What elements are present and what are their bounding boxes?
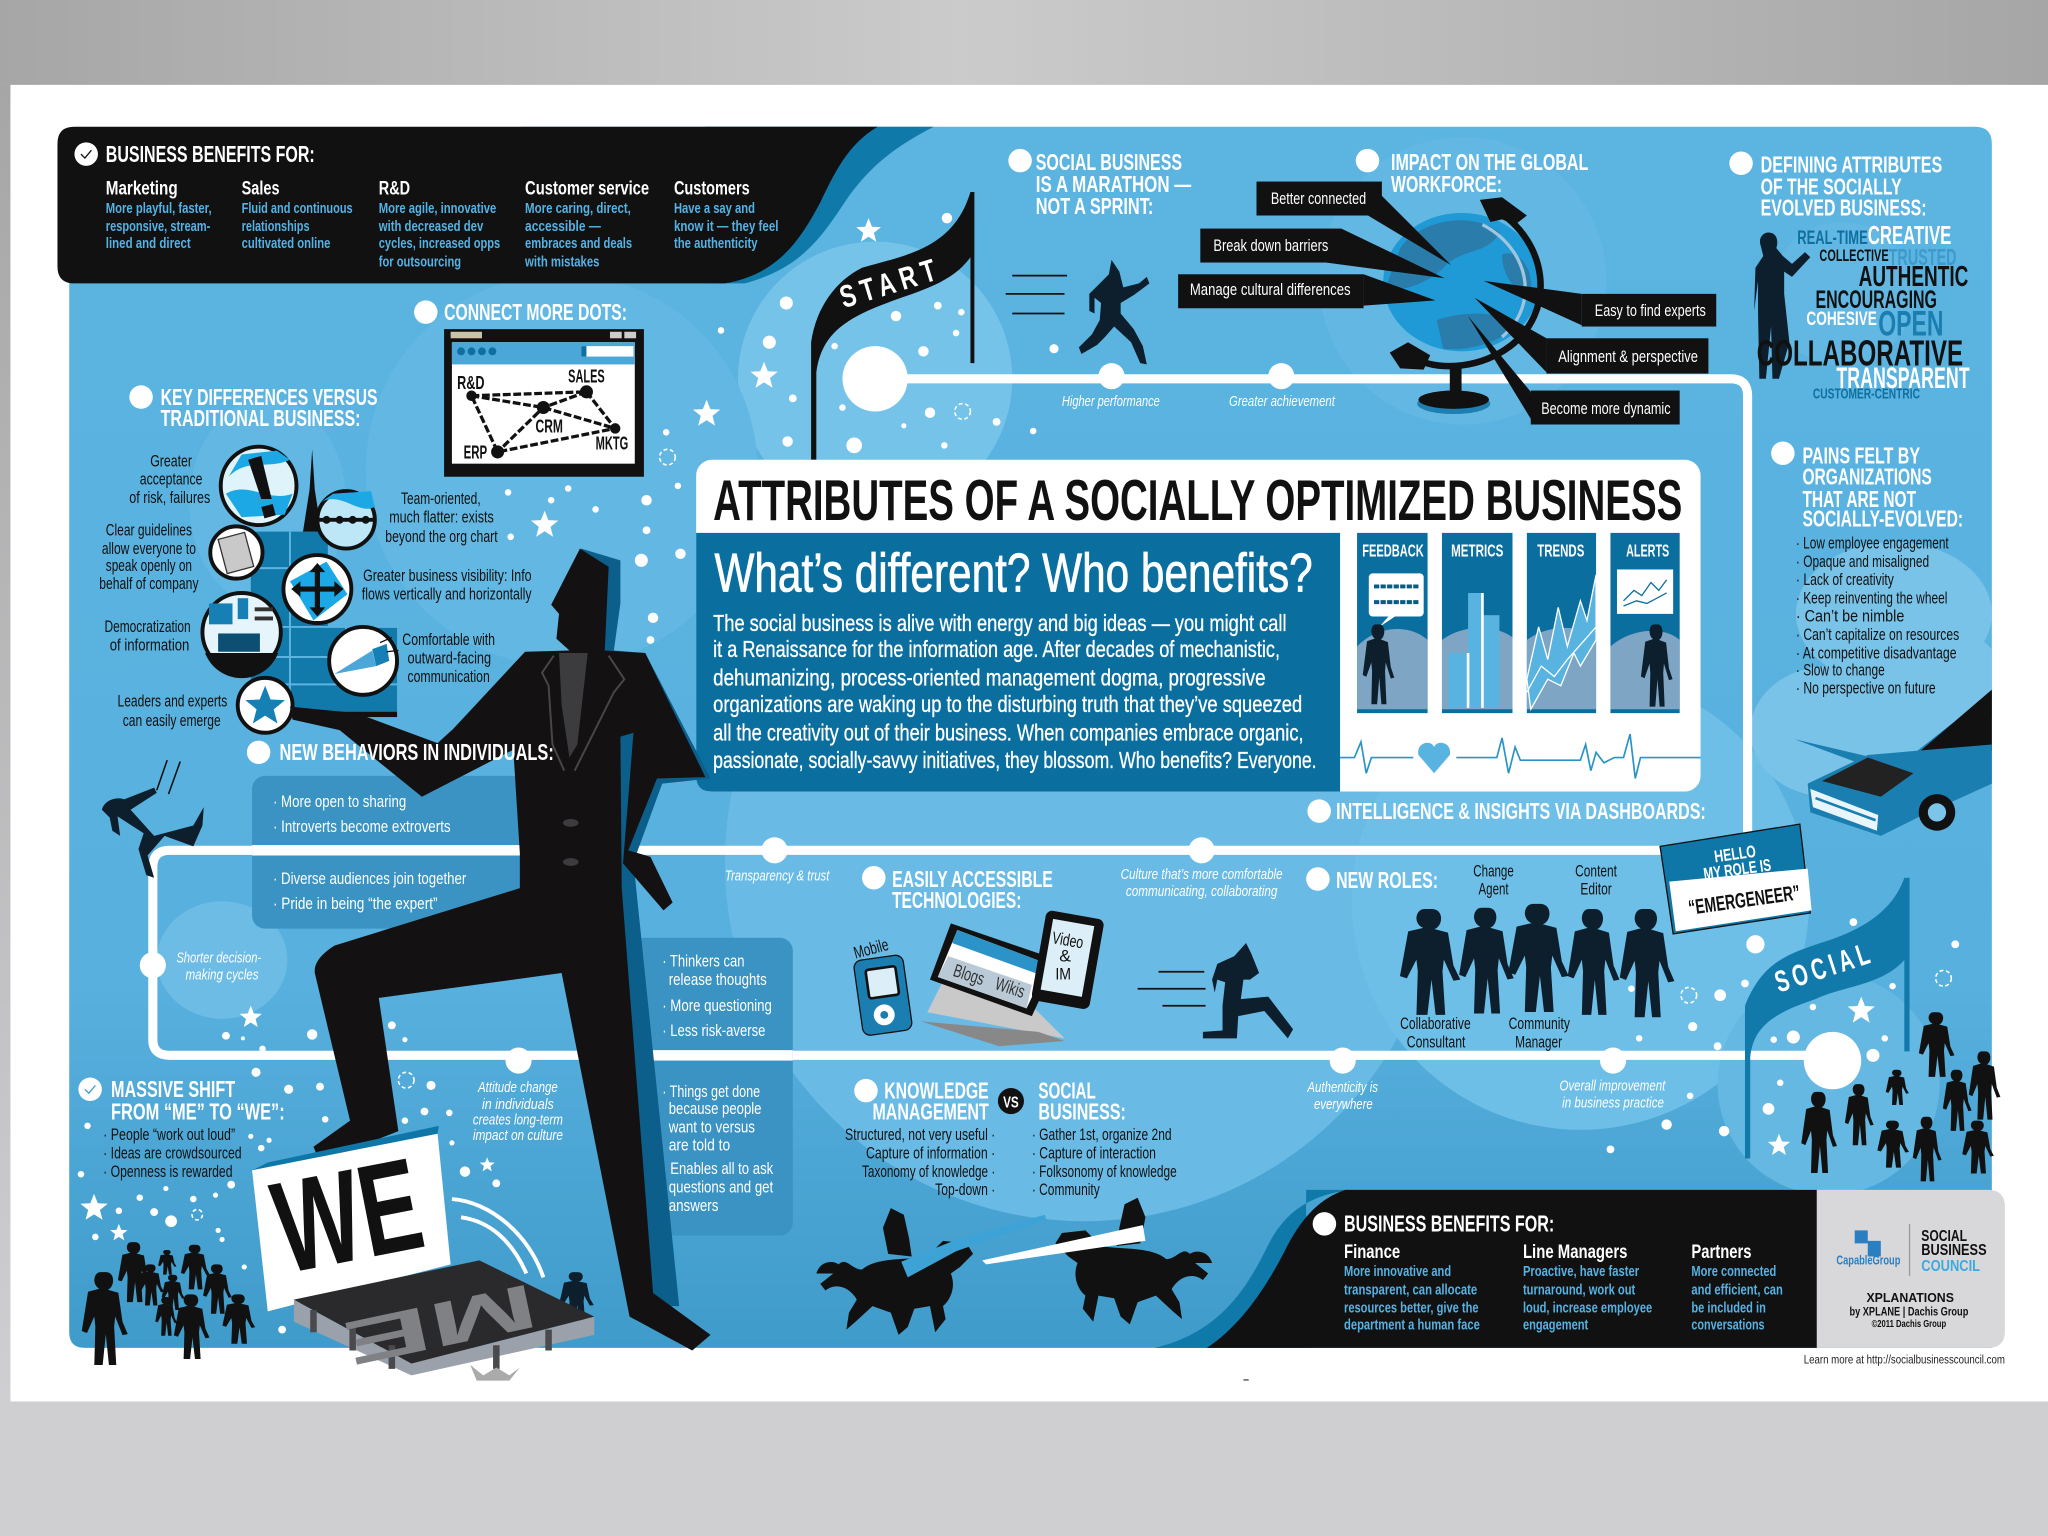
column: customer service: More caring, direct,: [525, 201, 631, 217]
panel: behaviors continued: · Less risk-averse: [662, 1021, 765, 1040]
list: massive shift: · People “work out loud”: [103, 1125, 235, 1144]
list: pains: · Can’t be nimble: [1796, 607, 1904, 626]
heading: knowledge vs social: [854, 1077, 1126, 1124]
heading: new behaviors: NEW BEHAVIORS IN INDIVIDUALS:: [280, 739, 554, 765]
devices: mobile, laptop, tablet: Wikis: [993, 973, 1028, 1002]
column: customer service: [524, 178, 649, 270]
heading: dashboards: [1307, 798, 1706, 824]
logo panel: [1817, 1190, 2005, 1348]
horse right: [1055, 1198, 1212, 1324]
italic milestone notes: [176, 394, 1666, 1144]
icon: globe: [1383, 197, 1541, 414]
list: massive shift: · Openness is rewarded: [103, 1162, 232, 1181]
heading: business benefits: [74, 141, 315, 167]
labels: new roles: Collaborative: [1400, 1014, 1471, 1033]
panel: business benefits bottom: [1155, 1190, 1817, 1348]
list: knowledge management: Top-down ·: [935, 1180, 995, 1199]
labels: new roles: Consultant: [1407, 1033, 1466, 1052]
callout: manage cultural differences: Manage cultural differences: [1190, 281, 1351, 299]
labels: key differences left: acceptance: [140, 470, 202, 489]
column: line managers: Proactive, have faster: [1523, 1264, 1639, 1280]
heading: business benefits: BUSINESS BENEFITS FOR:: [1344, 1211, 1554, 1237]
heading: defining attributes: OF THE SOCIALLY: [1761, 174, 1902, 200]
labels: key differences right: Greater business visibility: Info: [363, 566, 532, 585]
callout: better connected: Better connected: [1271, 190, 1366, 208]
icon: exclamation: [221, 447, 296, 525]
list: knowledge management: [845, 1125, 995, 1199]
heading: pains: PAINS FELT BY: [1802, 443, 1920, 469]
heading: massive shift: FROM “ME” TO “WE”:: [111, 1098, 285, 1124]
logo panel: SOCIAL: [1921, 1228, 1967, 1245]
list: social business: · Gather 1st, organize 2nd: [1032, 1125, 1172, 1144]
italic milestone notes: in business practice: [1562, 1096, 1664, 1112]
icon: org chain: [317, 491, 375, 549]
italic milestone notes: making cycles: [185, 968, 259, 984]
labels: key differences left: Leaders and experts: [118, 692, 227, 711]
column: customer service: embraces and deals: [525, 236, 632, 252]
word cloud: [1757, 220, 1970, 402]
labels: key differences left: of risk, failures: [129, 488, 210, 507]
column: customer service: with mistakes: [524, 254, 600, 270]
labels: key differences left: behalf of company: [99, 574, 199, 593]
column: sales: Fluid and continuous: [242, 201, 353, 217]
dashboard: trends: [1527, 533, 1596, 713]
list: pains: [1796, 534, 1959, 698]
panel: behaviors continued: · Enables all to ask: [662, 1159, 774, 1178]
word cloud: ENCOURAGING: [1816, 287, 1937, 314]
heading: massive shift: MASSIVE SHIFT: [111, 1076, 236, 1102]
heading: defining attributes: [1729, 151, 1942, 221]
labels: key differences left: Democratization: [104, 617, 191, 636]
panel: new behaviors: · More open to sharing: [273, 792, 406, 811]
labels: new roles: Change: [1473, 861, 1514, 880]
word cloud: REAL-TIME: [1797, 227, 1868, 249]
browser window: network diagram: MKTG: [596, 432, 628, 453]
heading: dashboards: INTELLIGENCE & INSIGHTS VIA DASHBOARDS:: [1336, 798, 1706, 824]
word cloud: CREATIVE: [1868, 220, 1951, 250]
column: finance: department a human face: [1344, 1318, 1480, 1334]
broken ME slab: ME: [337, 1270, 544, 1379]
panel: behaviors continued: answers: [669, 1196, 718, 1215]
column: sales: [242, 178, 353, 252]
panel: intro copy: dehumanizing, process-oriented management dogma, progressive: [713, 665, 1266, 691]
column: customers: Have a say and: [674, 201, 755, 217]
heading: massive shift: [78, 1076, 285, 1124]
figure: woman presenting: [1754, 232, 1810, 379]
building held by the man with icons: [202, 447, 398, 733]
word cloud: COLLECTIVE: [1819, 246, 1889, 265]
logo panel: CapableGroup: [1836, 1252, 1900, 1267]
card: WE: WE: [262, 1130, 433, 1301]
heading: technologies: [862, 866, 1053, 913]
callout: become more dynamic: [1468, 316, 1680, 424]
lance right: [982, 1225, 1145, 1264]
name tag: emergeneer: HELLO: [1713, 842, 1757, 866]
column: customers: the authenticity: [674, 236, 758, 252]
start flag: START: [836, 251, 946, 315]
panel: intro copy: organizations are waking up to the disturbing truth that they’ve squeezed: [713, 691, 1302, 717]
central man figure: [290, 549, 711, 1351]
column: marketing: More playful, faster,: [106, 201, 212, 217]
browser window: network diagram: CRM: [536, 415, 563, 436]
column: line managers: engagement: [1523, 1318, 1588, 1334]
name tag: emergeneer: MY ROLE IS: [1702, 855, 1772, 884]
crowd left: [82, 1242, 255, 1365]
column: sales: relationships: [242, 219, 310, 235]
list: pains: · Lack of creativity: [1796, 570, 1894, 589]
list: knowledge management: Structured, not very useful ·: [845, 1125, 995, 1144]
runner with speed lines: [1006, 260, 1149, 364]
column: sales: cultivated online: [242, 236, 330, 252]
panel: behaviors continued: · More questioning: [662, 996, 772, 1015]
heading: global workforce: WORKFORCE:: [1391, 171, 1502, 197]
labels: new roles: Content: [1575, 861, 1617, 880]
labels: key differences right: Comfortable with: [402, 630, 495, 649]
column: marketing: responsive, stream-: [106, 219, 210, 235]
italic milestone notes: Shorter decision-: [176, 951, 261, 967]
dashboard: metrics: [1442, 533, 1512, 713]
panel: intro copy: What’s different? Who benefits?: [714, 542, 1313, 604]
labels: key differences left: Greater: [150, 451, 192, 470]
list: knowledge management: Capture of information ·: [866, 1144, 995, 1163]
logo panel: BUSINESS: [1921, 1242, 1987, 1259]
list: social business: · Capture of interaction: [1032, 1144, 1156, 1163]
list: massive shift: [103, 1125, 242, 1181]
heading: technologies: EASILY ACCESSIBLE: [892, 866, 1053, 892]
column: marketing: Marketing: [106, 178, 178, 200]
heading: connect more dots: CONNECT MORE DOTS:: [444, 299, 627, 325]
column: finance: Finance: [1344, 1241, 1400, 1263]
list: knowledge management: Taxonomy of knowledge ·: [862, 1162, 995, 1181]
list: pains: · Keep reinventing the wheel: [1796, 588, 1947, 607]
callout: easy to find experts: Easy to find experts: [1595, 302, 1706, 320]
callout: become more dynamic: Become more dynamic: [1541, 400, 1671, 418]
central card: [696, 460, 1701, 792]
heading: knowledge vs social: SOCIAL: [1038, 1077, 1096, 1103]
column: R&D: [378, 178, 500, 270]
browser window: network diagram: SALES: [568, 366, 605, 387]
panel: behaviors continued: questions and get: [669, 1177, 773, 1196]
heading: marathon: NOT A SPRINT:: [1036, 193, 1153, 219]
column: line managers: turnaround, work out: [1523, 1282, 1635, 1298]
panel: new behaviors: · Pride in being “the expert”: [273, 894, 438, 913]
panel: intro copy: it a Renaissance for the information age. After decades of mechanistic,: [713, 636, 1280, 662]
column: customers: [674, 178, 778, 252]
labels: new roles: Editor: [1580, 880, 1612, 899]
labels: key differences left: allow everyone to: [102, 539, 196, 558]
name tag: emergeneer: “EMERGENEER”: [1687, 881, 1801, 920]
falling person: [102, 760, 204, 878]
heading: new behaviors: [247, 739, 554, 765]
column: R&D: cycles, increased opps: [379, 236, 500, 252]
column: finance: resources better, give the: [1344, 1301, 1479, 1317]
list: social business: · Folksonomy of knowledge: [1032, 1162, 1177, 1181]
heading: marathon: SOCIAL BUSINESS: [1036, 149, 1182, 175]
heading: marathon: IS A MARATHON —: [1036, 171, 1192, 197]
logo panel: by XPLANE | Dachis Group: [1849, 1305, 1968, 1318]
italic milestone notes: in individuals: [482, 1097, 554, 1113]
column: customers: Customers: [674, 178, 750, 200]
column: R&D: R&D: [379, 178, 410, 200]
callout: manage cultural differences: [1178, 274, 1435, 308]
italic milestone notes: impact on culture: [473, 1128, 563, 1144]
globe with callouts: [1178, 182, 1716, 424]
list: pains: · Slow to change: [1796, 660, 1885, 679]
jousting horses: [816, 1198, 1212, 1335]
heading: new roles: [1306, 867, 1438, 893]
italic milestone notes: Higher performance: [1062, 394, 1160, 410]
name tag: emergeneer: [1660, 824, 1812, 934]
icon: information devices: [202, 593, 281, 678]
panel: behaviors continued: release thoughts: [669, 970, 767, 989]
small dash mark: [1243, 1379, 1249, 1381]
callout: alignment & perspective: [1475, 298, 1708, 374]
panel: behaviors continued: are told to: [669, 1136, 730, 1155]
labels: key differences left: speak openly on: [106, 556, 192, 575]
icon: megaphone: [329, 627, 398, 695]
labels: new roles: Community: [1509, 1014, 1570, 1033]
labels: new roles: Manager: [1515, 1033, 1562, 1052]
list: pains: · Opaque and misaligned: [1796, 552, 1929, 571]
devices: mobile, laptop, tablet: &: [1059, 946, 1072, 965]
italic milestone notes: Overall improvement: [1560, 1079, 1666, 1095]
panel: intro copy: all the creativity out of their business. When companies embrace organic,: [713, 720, 1304, 746]
runner two with speed lines: [1138, 943, 1293, 1038]
labels: key differences left: Clear guidelines: [106, 521, 192, 540]
heading: business benefits: BUSINESS BENEFITS FOR:: [106, 141, 315, 167]
list: pains: · Low employee engagement: [1796, 534, 1949, 553]
list: massive shift: · Ideas are crowdsourced: [103, 1144, 242, 1163]
panel: behaviors continued: because people: [669, 1099, 761, 1118]
logo panel: XPLANATIONS: [1866, 1290, 1954, 1305]
heading: pains: [1771, 441, 1963, 531]
dashboard: alerts: [1610, 533, 1680, 713]
dashboard: alerts: ALERTS: [1626, 540, 1669, 560]
panel: behaviors continued: want to versus: [668, 1117, 755, 1136]
column: partners: conversations: [1691, 1318, 1765, 1334]
labels: key differences right: much flatter: exists: [389, 507, 494, 526]
column: finance: More innovative and: [1344, 1264, 1451, 1280]
social flag: [1745, 878, 1910, 1159]
dashboard: metrics: METRICS: [1451, 540, 1504, 560]
italic milestone notes: communicating, collaborating: [1126, 884, 1277, 900]
labels: new roles: Agent: [1479, 880, 1509, 899]
column: partners: be included in: [1691, 1301, 1766, 1317]
logo panel: COUNCIL: [1921, 1258, 1980, 1275]
icon: star: [238, 678, 293, 733]
icon: guidelines document: [210, 526, 263, 579]
italic milestone notes: Authenticity is: [1307, 1080, 1378, 1096]
italic milestone notes: Greater achievement: [1229, 394, 1336, 410]
panel: new behaviors: · Diverse audiences join together: [273, 869, 467, 888]
social flag: SOCIAL: [1771, 936, 1878, 999]
panel: behaviors continued: · Things get done: [662, 1082, 760, 1101]
column: partners: and efficient, can: [1691, 1282, 1783, 1298]
horse left: [816, 1208, 1046, 1335]
browser window: network diagram: R&D: [457, 372, 485, 393]
word cloud: TRUSTED: [1889, 244, 1957, 270]
column: finance: [1344, 1241, 1480, 1334]
start flag: [811, 192, 974, 460]
column: customer service: accessible —: [525, 219, 601, 235]
labels: key differences right: flows vertically and horizontally: [362, 585, 532, 604]
dashboard: feedback: [1357, 533, 1428, 713]
labels: key differences right: beyond the org chart: [385, 527, 498, 546]
callout: break down barriers: Break down barriers: [1213, 237, 1328, 255]
heading: connect more dots: [414, 299, 627, 325]
list: pains: · Can’t capitalize on resources: [1796, 625, 1959, 644]
heading: knowledge vs social: KNOWLEDGE: [884, 1077, 989, 1103]
column: R&D: More agile, innovative: [379, 201, 496, 217]
devices: mobile, laptop, tablet: Blogs: [951, 960, 987, 989]
panel: intro copy: The social business is alive with energy and big ideas — you might call: [713, 610, 1287, 636]
panel: intro copy: [696, 533, 1340, 792]
panel: new behaviors: [252, 776, 539, 929]
callout: easy to find experts: [1484, 281, 1716, 327]
column: partners: More connected: [1691, 1264, 1776, 1280]
labels: key differences right: Team-oriented,: [401, 489, 481, 508]
column: line managers: [1523, 1241, 1652, 1334]
devices: mobile, laptop, tablet: Video: [1051, 928, 1085, 952]
column: line managers: Line Managers: [1523, 1241, 1628, 1263]
heading: defining attributes: EVOLVED BUSINESS:: [1761, 195, 1927, 221]
word cloud: COHESIVE: [1806, 308, 1877, 330]
heading: defining attributes: DEFINING ATTRIBUTES: [1761, 151, 1942, 177]
heading: pains: THAT ARE NOT: [1802, 486, 1916, 512]
italic milestone notes: Culture that’s more comfortable: [1121, 867, 1283, 883]
column: finance: transparent, can allocate: [1344, 1282, 1477, 1298]
heading: pains: SOCIALLY-EVOLVED:: [1802, 505, 1963, 531]
callout: alignment & perspective: Alignment & perspective: [1558, 348, 1698, 366]
italic milestone notes: creates long-term: [473, 1113, 563, 1129]
list: pains: · No perspective on future: [1796, 679, 1936, 698]
main blue panel: [69, 127, 2011, 1348]
heading: key differences: TRADITIONAL BUSINESS:: [161, 405, 360, 431]
word cloud: AUTHENTIC: [1859, 261, 1968, 293]
devices: mobile, laptop, tablet: IM: [1055, 965, 1071, 984]
heading: pains: ORGANIZATIONS: [1802, 464, 1932, 490]
dashboard: trends: TRENDS: [1537, 540, 1584, 560]
panel: behaviors continued: [631, 938, 793, 1236]
italic milestone notes: everywhere: [1314, 1097, 1373, 1113]
column: sales: Sales: [242, 178, 280, 200]
labels: key differences left: of information: [110, 635, 189, 654]
sparkles: stars and dots: [78, 213, 1959, 1334]
logo panel: ©2011 Dachis Group: [1872, 1319, 1946, 1330]
list: pains: · At competitive disadvantage: [1796, 643, 1957, 662]
heading: global workforce: IMPACT ON THE GLOBAL: [1391, 149, 1588, 175]
column: customer service: Customer service: [525, 178, 649, 200]
broken ME slab: [294, 1260, 594, 1381]
labels: key differences left: [99, 451, 227, 730]
heading: technologies: TECHNOLOGIES:: [892, 887, 1021, 913]
dashboard: feedback: FEEDBACK: [1362, 540, 1424, 560]
list: social business: [1032, 1125, 1177, 1199]
crowd right: [1801, 1012, 2000, 1181]
word cloud: CUSTOMER-CENTRIC: [1813, 386, 1920, 402]
heading: knowledge vs social: VS: [1003, 1095, 1019, 1112]
path line with milestones: [140, 346, 1861, 1089]
ring sparkles: [192, 404, 1951, 1220]
column: marketing: [106, 178, 212, 252]
icon: arrows: [283, 555, 351, 623]
panel: behaviors continued: · Thinkers can: [662, 952, 744, 971]
column: partners: Partners: [1691, 1241, 1752, 1263]
italic milestone notes: Transparency & trust: [725, 868, 830, 884]
small figure on slab: [559, 1272, 594, 1322]
devices: mobile, laptop, tablet: [852, 910, 1105, 1046]
heading: business benefits: [1313, 1211, 1554, 1237]
labels: key differences right: communication: [408, 667, 490, 686]
labels: key differences right: outward-facing: [408, 649, 491, 668]
heading: marathon: [1008, 149, 1192, 219]
italic milestone notes: Attitude change: [477, 1080, 558, 1096]
column: R&D: with decreased dev: [378, 219, 483, 235]
motion arcs: [452, 1199, 543, 1277]
callout: better connected: [1256, 182, 1451, 265]
group: new role figures: [1400, 904, 1674, 1017]
labels: new roles: [1400, 861, 1617, 1052]
column: customers: know it — they feel: [674, 219, 778, 235]
panel: business benefits top: [57, 127, 934, 283]
panel: new behaviors: · Introverts become extroverts: [273, 817, 451, 836]
column: line managers: loud, increase employee: [1523, 1301, 1652, 1317]
browser window: network diagram: [444, 329, 644, 477]
heading: key differences: [129, 384, 377, 431]
car with open hood: [1795, 690, 1992, 836]
column: R&D: for outsourcing: [379, 254, 461, 270]
heartbeat line: [1340, 734, 1701, 778]
word cloud: OPEN: [1878, 305, 1944, 344]
heading: knowledge vs social: MANAGEMENT: [872, 1098, 989, 1124]
panel: intro copy: passionate, socially-savvy initiatives, they blossom. Who benefits? Everyone.: [713, 747, 1317, 773]
heading: key differences: KEY DIFFERENCES VERSUS: [161, 384, 377, 410]
labels: key differences left: can easily emerge: [123, 711, 221, 730]
callout: break down barriers: [1200, 229, 1445, 278]
heading: global workforce: [1356, 149, 1588, 197]
heading: new roles: NEW ROLES:: [1336, 867, 1438, 893]
browser window: network diagram: ERP: [464, 441, 487, 462]
heading: knowledge vs social: BUSINESS:: [1038, 1098, 1126, 1124]
devices: mobile, laptop, tablet: Mobile: [852, 935, 891, 963]
column: partners: [1691, 1241, 1783, 1334]
list: social business: · Community: [1032, 1180, 1100, 1199]
column: marketing: lined and direct: [106, 236, 191, 252]
labels: key differences right: [362, 489, 532, 686]
